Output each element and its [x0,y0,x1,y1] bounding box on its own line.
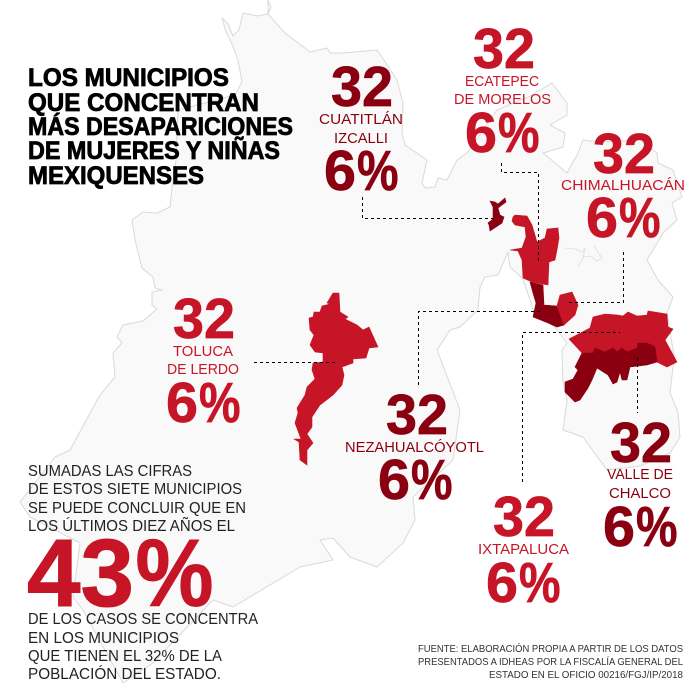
stat: Nezahualcóyotl: 6 [378,448,410,512]
stat: Valle de Chalco [603,411,678,559]
stat: Nezahualcóyotl: % [411,448,452,512]
stat: Cuautitlán Izcalli: CUATITLÁN [319,111,403,128]
stat: Chimalhuacán: 6 [586,186,618,250]
source note: ESTADO EN EL OFICIO 00216/FGJ/IP/2018 [489,669,683,681]
title: MEXIQUENSES [28,162,204,190]
stat: Toluca de Lerdo: DE LERDO [167,361,239,378]
region: Toluca de Lerdo [294,293,378,465]
text block: intro to the total: SUMADAS LAS CIFRAS [28,463,192,480]
stat: Chimalhuacán: % [619,186,660,250]
stat: Toluca de Lerdo: % [199,371,240,435]
big number: 43%: 43 [27,520,134,627]
region: Ixtapaluca [569,311,677,367]
text block: conclusion: EN LOS MUNICIPIOS [28,630,179,647]
stat: Ixtapaluca [478,485,569,615]
stat: Valle de Chalco: CHALCO [609,485,671,502]
stat: Ecatepec de Morelos: % [498,101,540,165]
stat: Valle de Chalco: 6 [603,495,635,559]
big number: 43%: % [136,520,214,627]
stat: Ecatepec de Morelos [454,17,551,165]
stat: Chimalhuacán [561,122,685,250]
stat: Ecatepec de Morelos: ECATEPEC [465,73,539,90]
stat: Valle de Chalco: 32 [610,411,672,475]
stat: Ecatepec de Morelos: DE MORELOS [454,91,551,108]
stat: Toluca de Lerdo [166,287,240,435]
title: LOS MUNICIPIOS [28,64,229,92]
stat: Toluca de Lerdo: 32 [173,287,235,351]
stat: Valle de Chalco: VALLE DE [607,466,673,483]
stat: Ixtapaluca: % [519,551,560,615]
stat: Ecatepec de Morelos: 6 [465,101,497,165]
stat: Toluca de Lerdo: TOLUCA [173,343,233,360]
title: MÁS DESAPARICIONES [28,112,293,141]
title: DE MUJERES Y NIÑAS [28,135,280,165]
stat: Cuautitlán Izcalli: 32 [331,55,393,119]
title [28,64,293,190]
stat: Chimalhuacán: CHIMALHUACÁN [561,177,685,194]
region: Chimalhuacán [557,292,578,325]
stat: Chimalhuacán: 32 [593,122,655,186]
title: QUE CONCENTRAN [28,89,259,117]
map: internal municipal squiggle [565,246,602,266]
stat: Nezahualcóyotl: 32 [386,383,448,447]
region: Cuautitlán Izcalli [488,198,506,231]
stat: Nezahualcóyotl: NEZAHUALCÓYOTL [345,439,484,456]
big number: 43% [27,520,214,627]
leader lines [254,163,638,482]
text block: conclusion: QUE TIENEN EL 32% DE LA [28,648,222,665]
stat: Ecatepec de Morelos: 32 [473,17,535,81]
stat: Cuautitlán Izcalli [319,55,403,203]
text block: conclusion: DE LOS CASOS SE CONCENTRA [28,611,258,628]
stat: Nezahualcóyotl [345,383,484,512]
text block: intro to the total [28,463,246,535]
stat: Valle de Chalco: % [636,495,678,559]
region: Nezahualcóyotl [530,282,564,327]
stat: Ixtapaluca: 32 [493,485,555,549]
text block: intro to the total: SE PUEDE CONCLUIR QUE EN [28,500,246,517]
text block: intro to the total: LOS ÚLTIMOS DIEZ AÑOS EL [28,515,235,535]
stat: Ixtapaluca: 6 [486,551,518,615]
source note [418,642,683,681]
stat: Cuautitlán Izcalli: IZCALLI [334,130,388,147]
stat: Toluca de Lerdo: 6 [166,371,198,435]
stat: Ixtapaluca: IXTAPALUCA [478,541,569,558]
text block: conclusion [28,611,258,683]
stat: Cuautitlán Izcalli: 6 [324,139,356,203]
region: Valle de Chalco [565,343,657,402]
text block: intro to the total: DE ESTOS SIETE MUNICIPIOS [28,481,242,498]
region: Ecatepec de Morelos [510,215,559,285]
stat: Cuautitlán Izcalli: % [357,139,398,203]
text block: conclusion: POBLACIÓN DEL ESTADO. [28,664,221,683]
